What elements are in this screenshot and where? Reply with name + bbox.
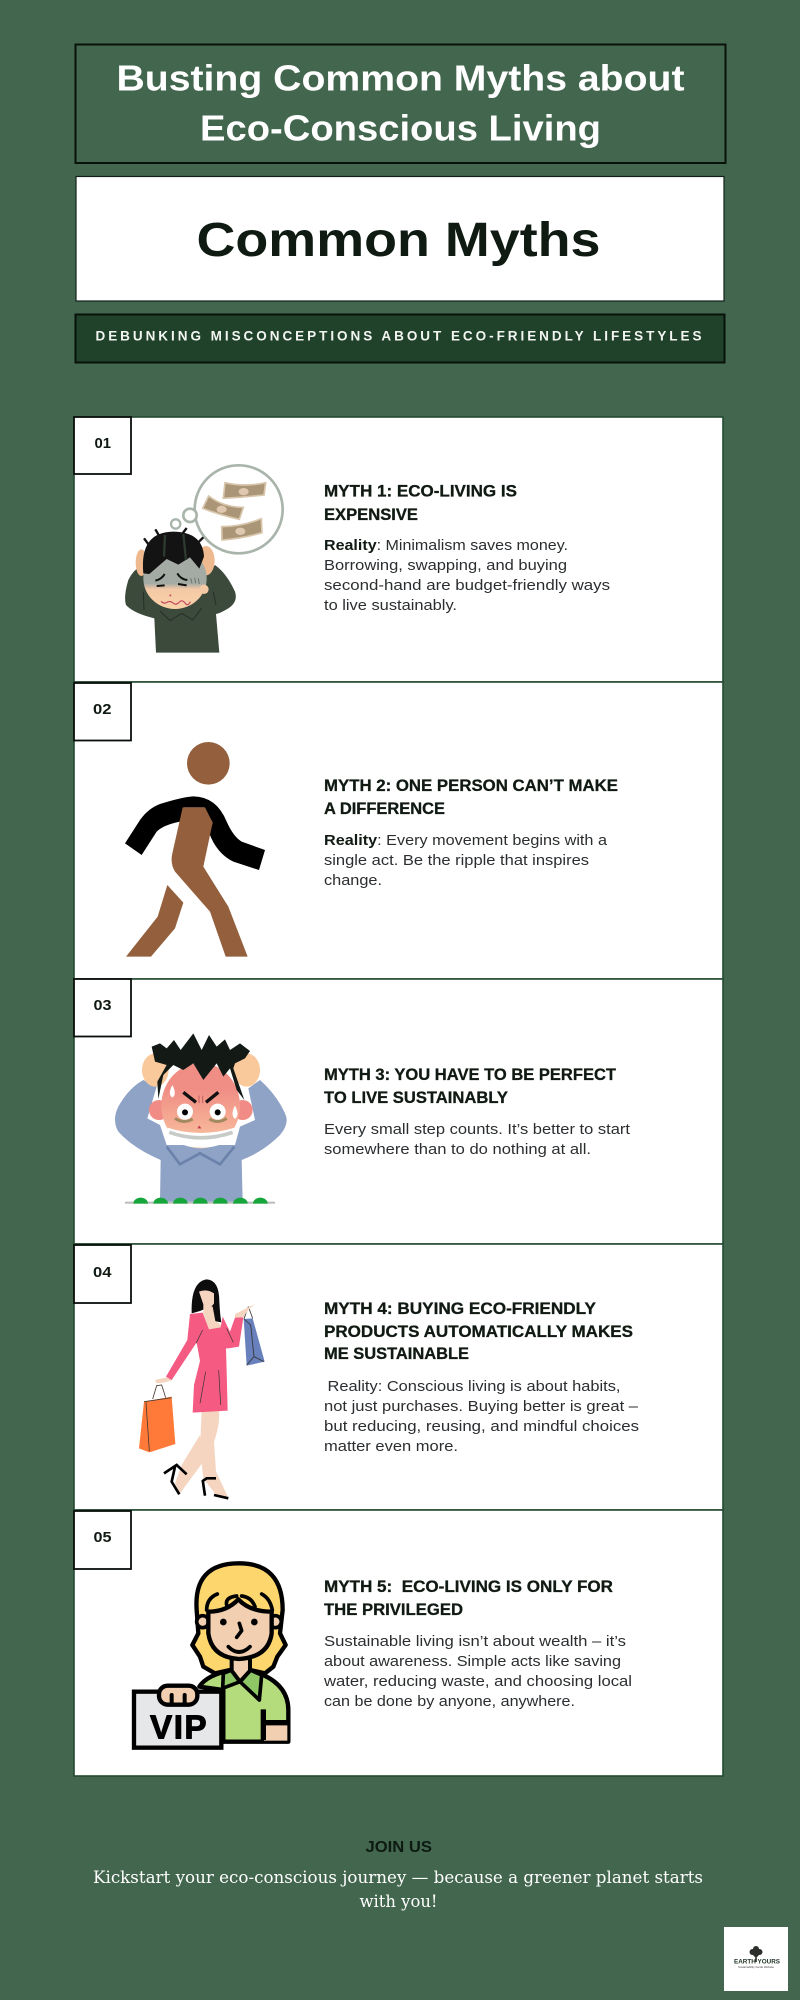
myth 5 text: can be done by anyone, anywhere.: [324, 1694, 575, 1710]
myth 1 text: to live sustainably.: [324, 598, 457, 614]
panel: myth 5: [74, 1510, 723, 1776]
logo: Sustainability Guide Website: [738, 1965, 775, 1969]
subtitle banner: DEBUNKING MISCONCEPTIONS ABOUT ECO-FRIENDLY LIFESTYLES: [96, 328, 702, 344]
myth 1 text: [324, 482, 610, 614]
myth 4 text: [324, 1300, 639, 1455]
myth 4 text: MYTH 4: BUYING ECO-FRIENDLY: [324, 1300, 596, 1318]
illustration: worried man thinking about money: [125, 465, 283, 653]
number badge 02: 02: [93, 701, 112, 718]
logo: [724, 1927, 788, 1991]
panel: myth 3: [74, 979, 723, 1244]
subtitle banner: [76, 314, 724, 362]
myth 4 text: not just purchases. Buying better is great –: [324, 1399, 639, 1415]
call to action text: Kickstart your eco-conscious journey — because a greener planet starts: [93, 1868, 703, 1888]
call to action text: [93, 1868, 703, 1912]
number badge 01: 01: [94, 435, 111, 452]
illustration: woman holding VIP sign: VIP: [150, 1709, 207, 1746]
myth 5 text: MYTH 5: ECO-LIVING IS ONLY FOR: [324, 1578, 613, 1596]
title panel: Busting Common Myths about: [116, 58, 685, 98]
title panel: Eco-Conscious Living: [200, 108, 601, 148]
number badge 03: [74, 979, 131, 1036]
call to action text: with you!: [360, 1892, 438, 1912]
myth 3 text: Every small step counts. It’s better to start: [324, 1122, 630, 1138]
myth 4 text: but reducing, reusing, and mindful choices: [324, 1419, 639, 1435]
myth 2 text: MYTH 2: ONE PERSON CAN’T MAKE: [324, 777, 618, 795]
heading panel: common myths: Common Myths: [196, 214, 600, 267]
illustration: walking person: [125, 742, 265, 957]
myth 4 text: ME SUSTAINABLE: [324, 1345, 469, 1363]
myth 1 text: Borrowing, swapping, and buying: [324, 558, 567, 574]
number badge 01: [74, 417, 131, 474]
panel: myth 2: [74, 682, 723, 979]
myth 2 text: A DIFFERENCE: [324, 800, 445, 818]
myth 2 text: change.: [324, 873, 382, 889]
heading panel: common myths: [76, 176, 724, 301]
myth 1 text: EXPENSIVE: [324, 506, 418, 524]
myth 3 text: TO LIVE SUSTAINABLY: [324, 1089, 508, 1107]
number badge 03: 03: [94, 997, 112, 1014]
number badge 04: 04: [93, 1264, 112, 1281]
title panel: [76, 44, 726, 163]
myth 5 text: [323, 1578, 632, 1710]
myth 5 text: about awareness. Simple acts like saving: [324, 1654, 621, 1670]
illustration: woman with shopping bags: [139, 1279, 265, 1498]
logo: EARTH YOURS: [734, 1960, 780, 1966]
myth 2 text: Reality : Every movement begins with a: [324, 833, 608, 849]
number badge 05: [74, 1511, 131, 1569]
myth 3 text: [324, 1066, 630, 1158]
join us heading: JOIN US: [366, 1839, 432, 1856]
myth 4 text: matter even more.: [324, 1439, 458, 1455]
myth 5 text: water, reducing waste, and choosing local: [323, 1674, 632, 1690]
myth 5 text: THE PRIVILEGED: [324, 1601, 463, 1619]
number badge 02: [74, 683, 131, 740]
panel: myth 1: [74, 417, 723, 682]
number badge 05: 05: [94, 1529, 112, 1546]
myth 5 text: Sustainable living isn’t about wealth – it’s: [324, 1634, 626, 1650]
myth 4 text: Reality: Conscious living is about habits,: [328, 1379, 620, 1395]
number badge 04: [74, 1245, 131, 1303]
myth 2 text: [324, 777, 618, 889]
illustration: stressed man pulling hair: [115, 1033, 287, 1204]
myth 3 text: MYTH 3: YOU HAVE TO BE PERFECT: [324, 1066, 616, 1084]
myth 1 text: Reality : Minimalism saves money.: [324, 538, 568, 554]
myth 2 text: single act. Be the ripple that inspires: [324, 853, 589, 869]
panel: myth 4: [74, 1244, 723, 1510]
myth 1 text: second-hand are budget-friendly ways: [324, 578, 610, 594]
illustration: woman holding VIP sign: [134, 1563, 288, 1748]
myth 4 text: PRODUCTS AUTOMATICALLY MAKES: [324, 1323, 633, 1341]
myth 1 text: MYTH 1: ECO-LIVING IS: [324, 482, 517, 500]
myth 3 text: somewhere than to do nothing at all.: [324, 1142, 591, 1158]
